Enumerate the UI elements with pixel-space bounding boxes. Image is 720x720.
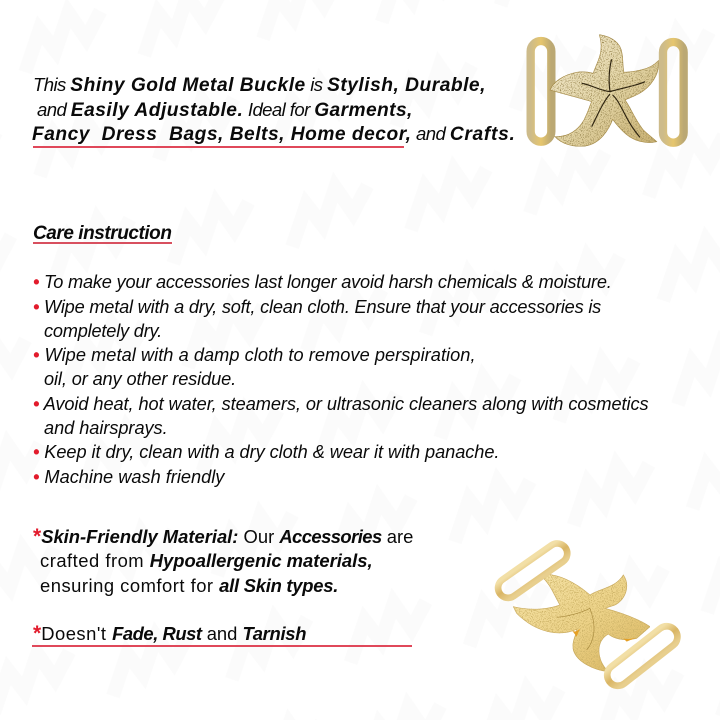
intro text block: and Easily Adjustable. Ideal for Garments, <box>37 99 413 121</box>
skin-friendly material text: *Skin-Friendly Material: Our Accessories are <box>33 525 413 548</box>
intro text block <box>32 74 516 148</box>
skin-friendly material text: crafted from Hypoallergenic materials, <box>40 550 373 571</box>
care instruction list: • Wipe metal with a damp cloth to remove perspiration, <box>33 345 476 365</box>
care instruction list: • Avoid heat, hot water, steamers, or ultrasonic cleaners along with cosmetics <box>33 394 649 414</box>
fade rust tarnish note: *Doesn't Fade, Rust and Tarnish <box>33 622 306 645</box>
skin-friendly material text: ensuring comfort for all Skin types. <box>40 575 338 596</box>
care instruction list: • To make your accessories last longer avoid harsh chemicals & moisture. <box>33 272 612 292</box>
care instruction list <box>33 272 649 487</box>
care instruction list: • Keep it dry, clean with a dry cloth & wear it with panache. <box>33 442 499 462</box>
care instruction heading: Care instruction <box>33 223 172 244</box>
care instruction list: • Wipe metal with a dry, soft, clean cloth. Ensure that your accessories is <box>33 297 601 317</box>
skin-friendly material text <box>33 525 413 596</box>
intro text block: Fancy Dress Bags, Belts, Home decor, and Crafts. <box>32 123 516 145</box>
care instruction list: and hairsprays. <box>44 418 168 438</box>
intro text block: This Shiny Gold Metal Buckle is Stylish, Durable, <box>33 74 486 96</box>
care instruction list: completely dry. <box>44 321 162 341</box>
care instruction list: • Machine wash friendly <box>33 467 224 487</box>
care instruction list: oil, or any other residue. <box>44 369 236 389</box>
